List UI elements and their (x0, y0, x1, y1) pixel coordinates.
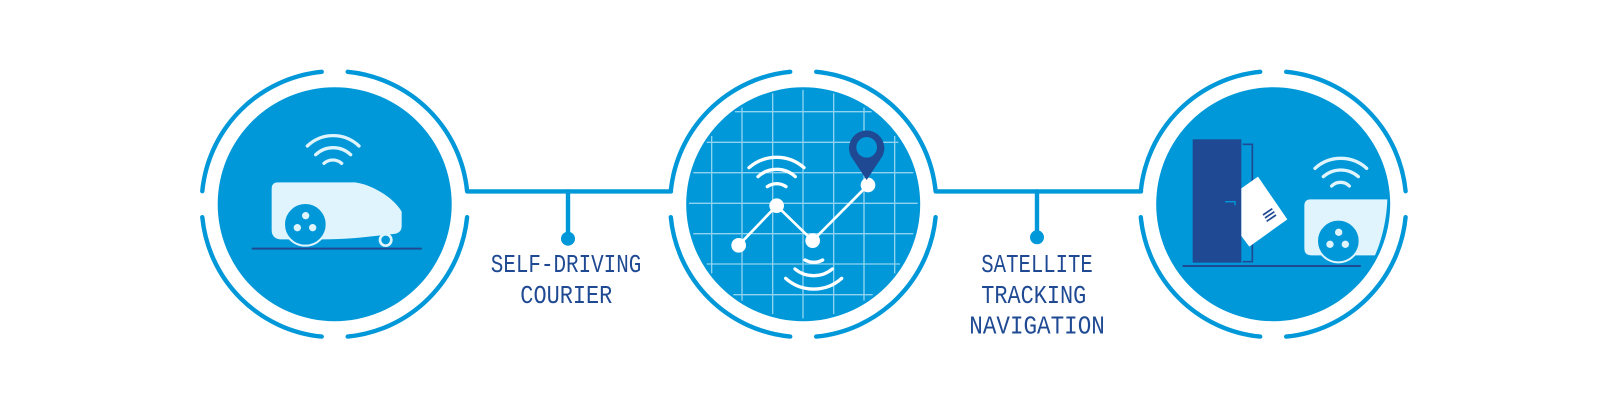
icon: door, parcel and robot (1183, 139, 1387, 266)
icon: courier robot with wifi (253, 136, 421, 249)
upper wifi signal (749, 157, 804, 187)
front wheel (284, 203, 327, 246)
icon: route on map grid (689, 90, 918, 318)
parcel (1241, 177, 1287, 247)
lower wifi signal (786, 260, 842, 289)
small rear wheel (380, 234, 391, 246)
filled blue disc (1156, 87, 1390, 321)
panel: satellite tracking map icon (671, 72, 936, 337)
label: self-driving courier: COURIER (520, 282, 612, 311)
segmented outer ring (1141, 72, 1406, 337)
robot body (1304, 199, 1387, 255)
route nodes (731, 178, 875, 253)
robot wheel (1317, 220, 1360, 262)
label: self-driving courier: SELF-DRIVING (491, 251, 641, 280)
connector: second circle to third circle (936, 191, 1141, 244)
door (1193, 139, 1241, 263)
door handle (1225, 202, 1235, 205)
label: satellite tracking navigation (969, 251, 1105, 342)
label: self-driving courier (491, 251, 641, 311)
ground line (253, 246, 421, 252)
icon: location pin (849, 130, 884, 180)
filled blue disc (218, 87, 452, 321)
connector: first circle to second circle (467, 191, 671, 246)
ground line (1183, 263, 1360, 269)
panel: self-driving courier icon (202, 72, 467, 337)
segmented outer ring (671, 72, 936, 337)
robot body (272, 182, 402, 239)
map grid (689, 90, 918, 318)
label: satellite tracking navigation: TRACKING (981, 282, 1086, 311)
label: satellite tracking navigation: SATELLITE (981, 251, 1093, 280)
filled blue disc (686, 87, 920, 321)
wifi signal (307, 136, 359, 163)
segmented outer ring (202, 72, 467, 337)
label: satellite tracking navigation: NAVIGATION (969, 312, 1105, 342)
panel: parcel delivery at door icon (1141, 72, 1406, 337)
route line (739, 185, 868, 245)
door frame (1243, 144, 1252, 262)
wifi signal (1315, 158, 1367, 186)
